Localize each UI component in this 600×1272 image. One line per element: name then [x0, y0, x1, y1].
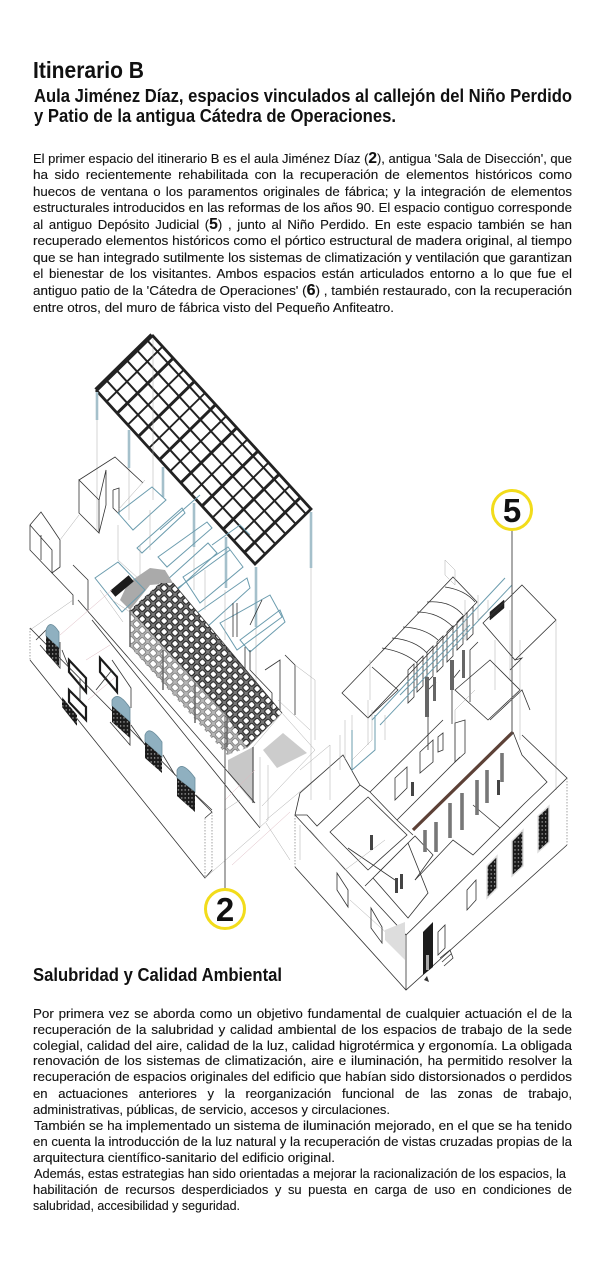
entrance door and stairs [385, 922, 453, 982]
text block: intro paragraph: huecos de ventana o los paramentos originales de fábrica; y la integración de elementos [33, 184, 573, 199]
text block: intro paragraph: estructurales introducidos en las reformas de los años 90. El espacio contiguo corresponde [33, 200, 572, 215]
text block: intro paragraph: entre otros, del muro de fábrica visto del Pequeño Anfiteatro. [33, 300, 394, 315]
text block: intro paragraph: antiguo patio de la 'Cátedra de Operaciones' ( 6) , también restaurado, con la recuperación [33, 282, 572, 299]
visitor figures [370, 780, 500, 893]
text block: salubridad paragraph: También se ha implementado un sistema de iluminación mejorado, en el que se ha tenido [34, 1118, 572, 1133]
text block: salubridad paragraph: renovación de los sistemas de climatización, aire e iluminación, ha permitido resolver la [33, 1053, 573, 1068]
flat roof panel [455, 585, 556, 790]
subtitle [34, 86, 572, 126]
roof support columns [97, 338, 311, 800]
text block: salubridad paragraph: habilitación de recursos desperdiciados y su puesta en carga de uso en condiciones de [33, 1182, 572, 1197]
text block: salubridad paragraph: arquitectura científico-sanitario del edificio original. [33, 1150, 335, 1165]
axonometric drawing: aula Jiménez Díaz [30, 335, 320, 878]
subtitle: y Patio de la antigua Cátedra de Operaciones. [34, 106, 396, 126]
title: Itinerario B [33, 57, 144, 83]
outer windows [337, 806, 549, 943]
timber beam and columns [413, 732, 513, 852]
section heading: Salubridad y Calidad Ambiental [33, 965, 282, 985]
text block: intro paragraph: ha sido recientemente rehabilitada con la recuperación de elementos históricos como [33, 167, 572, 182]
callout: marker 2: 2 [216, 891, 234, 928]
text block: salubridad paragraph: Por primera vez se aborda como un objetivo fundamental de cualquier actuación el de la [33, 1006, 573, 1021]
stage floor [95, 562, 173, 622]
text block: salubridad paragraph: administrativas, públicas, de servicio, accesos y circulaciones. [33, 1102, 390, 1117]
text block: intro paragraph: El primer espacio del itinerario B es el aula Jiménez Díaz (2), antigua 'Sala de Disección', que [33, 150, 572, 167]
text block: intro paragraph: al antiguo Depósito Judicial (5) , junto al Niño Perdido. En este espacio también se han [33, 216, 572, 233]
barrel vault roof [342, 577, 477, 718]
suspended ceiling frames [118, 487, 285, 670]
callout: marker 5 [492, 490, 532, 735]
subtitle: Aula Jiménez Díaz, espacios vinculados al callejón del Niño Perdido [34, 86, 572, 106]
text block: salubridad paragraph: recuperación de espacios originales del edificio que habían sido distorsionados o perdidos [33, 1069, 573, 1084]
masonry wall blocks [30, 457, 145, 630]
callout: marker 5: 5 [503, 492, 521, 529]
text block: intro paragraph [33, 150, 573, 315]
text block: salubridad paragraph: en actuaciones anteriores y la reorganización funcional de las zonas de trabajo, [33, 1086, 572, 1101]
text block: intro paragraph: el bienestar de los visitantes. Ambos espacios están articulados entorno a lo que fue el [33, 266, 572, 281]
callout: marker 2 [206, 716, 244, 928]
text block: salubridad paragraph [33, 1006, 573, 1213]
window elements [46, 624, 195, 812]
clerestory windows [370, 560, 520, 750]
text block: salubridad paragraph: en cuenta la introducción de la luz natural y la recuperación de vistas cruzadas propias de la [33, 1134, 573, 1149]
text block: salubridad paragraph: Además, estas estrategias han sido orientadas a mejorar la racionalización de los espacios, la [34, 1166, 567, 1181]
text block: salubridad paragraph: recuperación de la salubridad y calidad ambiental de los espacios de trabajo de la sede [33, 1022, 572, 1037]
auditorium seats [130, 583, 282, 755]
roof grid [96, 335, 311, 564]
lower windows wall [30, 590, 290, 878]
text block: intro paragraph: que se han integrado sutilmente los sistemas de climatización y ventilación que garantizan [33, 250, 572, 265]
text block: salubridad paragraph: salubridad, accesibilidad y seguridad. [33, 1198, 240, 1213]
text block: intro paragraph: recuperado elementos históricos como el pórtico estructural de madera original, al tiempo [33, 233, 572, 248]
axonometric drawing: Depósito Judicial [295, 560, 567, 990]
main building outline [295, 700, 567, 990]
text block: salubridad paragraph: colegial, calidad del aire, calidad de la luz, calidad higrotérmica y ergonomía. La obligada [33, 1038, 573, 1053]
entrance lobby [228, 650, 320, 860]
